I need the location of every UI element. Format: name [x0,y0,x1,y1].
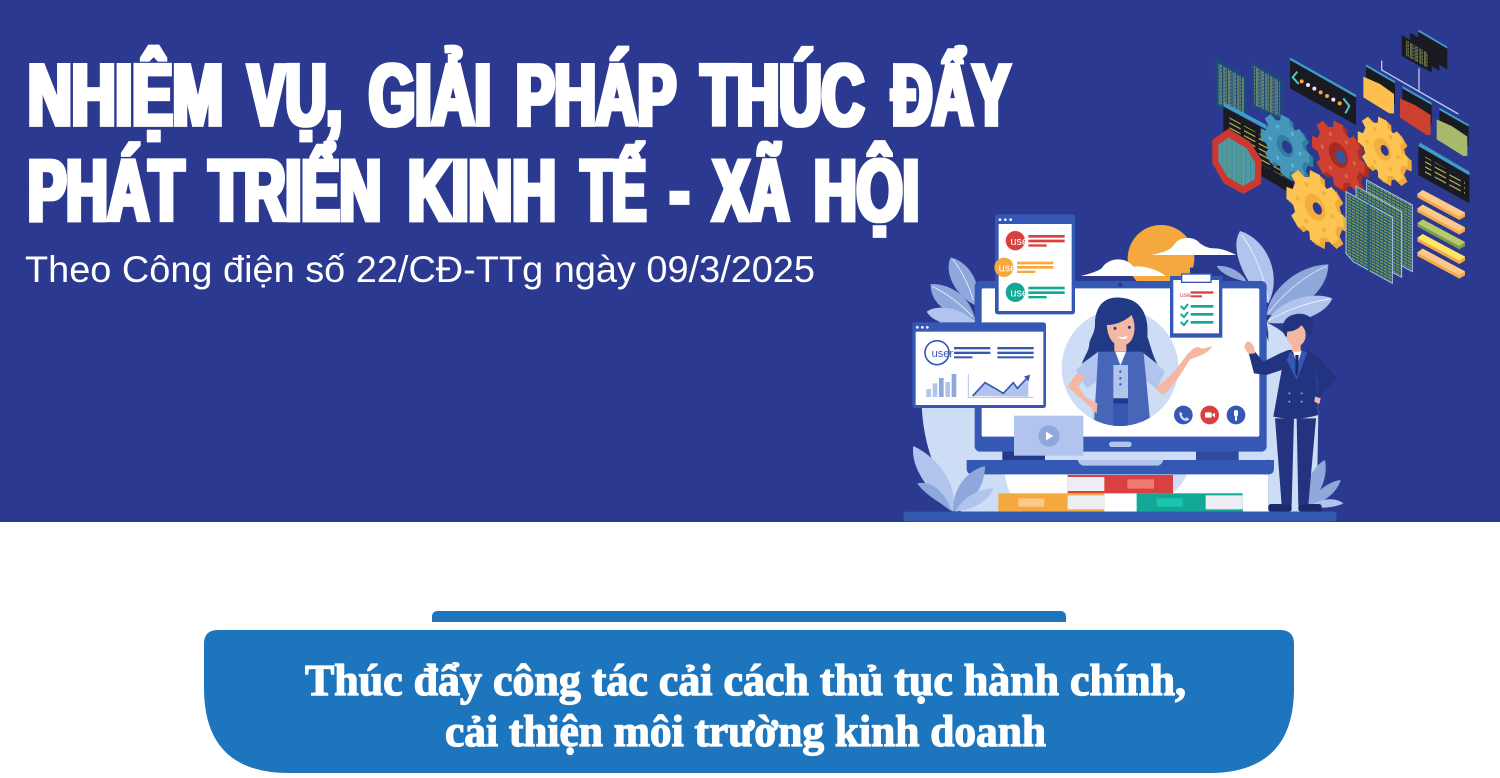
illustration: isometric technology blocks [1212,29,1469,283]
red gear [1312,109,1369,205]
businessman [1244,314,1338,512]
section banner [204,630,1294,773]
subtitle: Theo Công điện số 22/CĐ-TTg ngày 09/3/2025 [25,249,815,290]
ground line [903,512,1337,522]
title: TRIỂN [209,142,381,240]
banner heading [305,656,1186,756]
title: - [670,142,689,240]
background circle [922,316,1318,512]
red octagon lens [1212,129,1262,194]
user list card: use [1010,236,1028,248]
title: KINH [408,142,556,240]
binary data panels [1215,58,1283,120]
woman presenter [1062,298,1212,427]
leaves left and right [927,231,1332,325]
section tab [432,611,1066,622]
illustration: video call scene [903,214,1344,522]
user list card: use [1010,288,1028,300]
analytics card: user [932,348,953,360]
title: ĐẨY [892,47,1010,144]
banner heading: cải thiện môi trường kinh doanh [445,707,1046,756]
colored bars [1417,190,1465,279]
slider code panel [1290,57,1356,125]
yellow gear bottom [1286,158,1348,261]
yellow gear right [1358,106,1412,197]
code panel right [1418,143,1469,203]
analytics card [912,322,1046,408]
checklist clipboard: use [1180,292,1191,299]
clouds [1081,238,1236,276]
checklist clipboard [1170,268,1222,338]
title: XÃ [713,142,789,240]
header background [0,0,1500,522]
title: HỘI [814,142,919,240]
user list card: use [999,263,1016,275]
sun [1128,225,1194,281]
banner heading: Thúc đẩy công tác cải cách thủ tục hành chính, [305,656,1186,705]
video thumbnail [1014,416,1083,456]
title: PHÁP [516,47,676,144]
title: TẾ [581,142,646,240]
blue gear [1261,104,1313,192]
title: NHIỆM [28,47,223,144]
user list card [994,214,1075,314]
title: GIẢI [369,47,491,144]
folder hierarchy [1363,29,1469,156]
title: PHÁT [28,142,184,240]
title [28,47,1010,240]
title: VỤ, [248,47,342,144]
code panel left [1223,102,1293,195]
books [998,475,1243,512]
data sheets stack [1346,180,1412,283]
leaves bottom [913,446,1343,512]
title: THÚC [701,47,864,144]
monitor [967,281,1274,474]
call buttons [1174,406,1245,424]
